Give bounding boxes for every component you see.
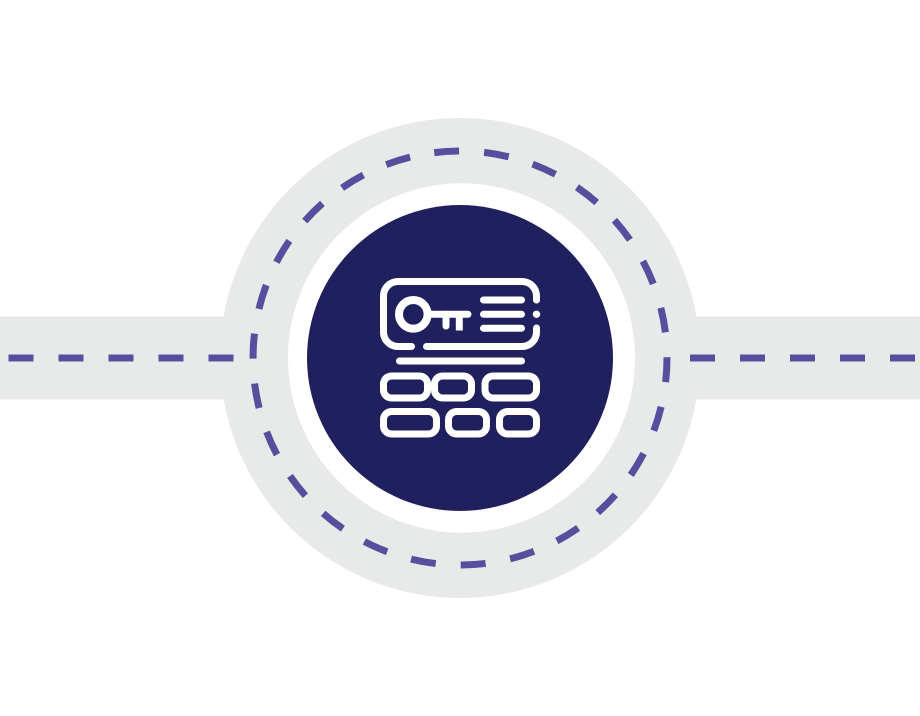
centre: navy circle	[307, 205, 613, 511]
icon: card outline	[384, 282, 540, 346]
icon: key	[399, 300, 468, 330]
icon: divider line	[400, 358, 522, 364]
road markings: circular dashed line	[229, 127, 691, 589]
icon: key card and keypad	[384, 282, 540, 434]
icon: keypad top row	[384, 376, 536, 398]
icon: text lines on card	[484, 300, 522, 328]
road markings: left dashes	[8, 354, 234, 362]
road markings: right dashes	[690, 354, 915, 362]
ring: white inner gap	[288, 183, 635, 533]
icon: keypad bottom row	[384, 412, 536, 434]
road: horizontal grey band	[0, 316, 920, 400]
roundabout: outer grey ring	[220, 118, 700, 598]
